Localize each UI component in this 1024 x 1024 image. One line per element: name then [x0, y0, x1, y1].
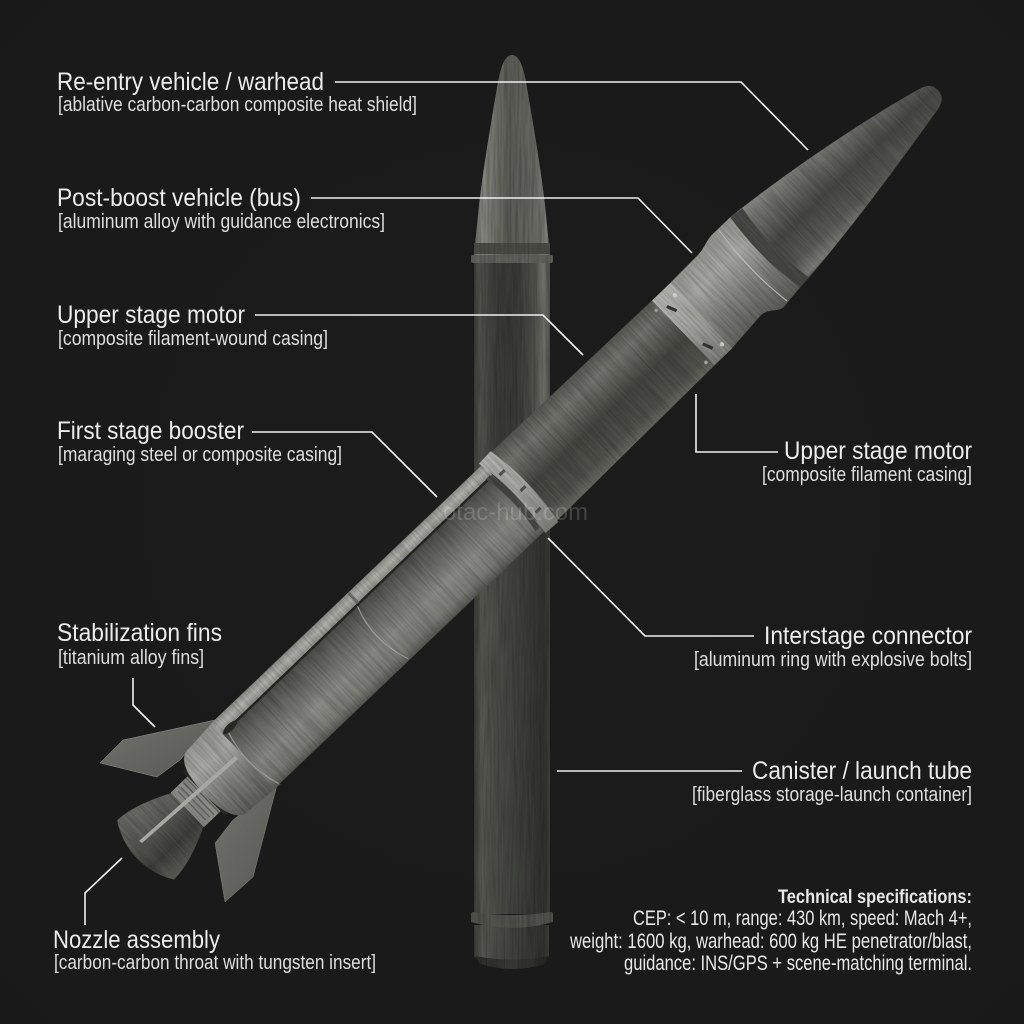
label: re-entry vehicle: [ablative carbon-carbon composite heat shield]: [58, 94, 417, 116]
canister foot: [475, 956, 549, 969]
booster rail tube: [212, 464, 495, 737]
leader: nozzle assembly: [85, 858, 122, 925]
canister tube lower body: [474, 530, 550, 914]
label: first stage booster: [57, 417, 342, 466]
label: canister: Canister / launch tube: [752, 757, 972, 785]
label: first stage booster: First stage booster: [57, 417, 244, 445]
nozzle threaded neck: [167, 766, 231, 831]
label: upper stage motor: [57, 301, 328, 350]
technical specifications: Technical specifications:: [778, 887, 972, 908]
label: nozzle assembly: [carbon-carbon throat with tungsten insert]: [54, 952, 376, 974]
label: interstage connector: Interstage connector: [764, 622, 972, 650]
nozzle bell: [108, 775, 222, 888]
booster seam: [352, 605, 408, 664]
canister bottom section: [474, 925, 549, 960]
canister tube upper body: [474, 260, 550, 532]
label: upper stage motor: [composite filament-wound casing]: [58, 328, 328, 350]
fin: upper left: [100, 720, 215, 777]
label: upper stage motor: Upper stage motor: [57, 301, 245, 329]
label: stabilization fins: [titanium alloy fins]: [58, 647, 204, 669]
fin: lower: [215, 785, 277, 902]
fin: centre blade: [139, 756, 238, 843]
label: interstage connector: [aluminum ring with explosive bolts]: [694, 649, 972, 671]
leader: post-boost vehicle: [311, 198, 692, 253]
label: post-boost vehicle: Post-boost vehicle (bus): [57, 184, 301, 212]
label: re-entry vehicle: Re-entry vehicle / warhead: [57, 68, 324, 96]
leader: re-entry vehicle: [335, 82, 808, 150]
leader: canister: [557, 770, 742, 772]
canister nose: [474, 55, 550, 255]
canister bottom collar: [471, 912, 553, 928]
technical specifications: [569, 887, 972, 975]
leader: upper stage motor right: [696, 394, 778, 452]
missile: [100, 52, 973, 902]
label: stabilization fins: [57, 619, 222, 669]
upper motor ring: [648, 283, 732, 369]
tail seam: [223, 730, 278, 788]
nose collar: [710, 216, 802, 311]
upper stage motor: [490, 296, 719, 522]
label: canister: [692, 757, 972, 806]
nose band: [728, 207, 810, 291]
tail section: [172, 718, 281, 827]
leader: interstage connector: [548, 538, 754, 636]
label: canister: [fiberglass storage-launch container]: [692, 784, 972, 806]
label: first stage booster: [maraging steel or composite casing]: [58, 444, 342, 466]
label: post-boost vehicle: [57, 184, 385, 233]
canister top collar: [471, 255, 553, 263]
post-boost neck: [664, 234, 784, 354]
label: nozzle assembly: Nozzle assembly: [53, 926, 220, 954]
leader: stabilization fins: [133, 678, 155, 727]
label: upper stage motor right: [composite filament casing]: [762, 464, 972, 486]
interstage connector ring: [474, 448, 562, 538]
label: re-entry vehicle: [57, 68, 417, 116]
label: nozzle assembly: [53, 926, 376, 974]
re-entry vehicle nose cone: [728, 52, 971, 291]
label: post-boost vehicle: [aluminum alloy with guidance electronics]: [58, 211, 385, 233]
canister band: [474, 243, 550, 254]
label: interstage connector: [694, 622, 972, 671]
canister / launch tube: [471, 55, 553, 969]
label: stabilization fins: Stabilization fins: [57, 619, 222, 647]
label: upper stage motor right: [762, 437, 972, 486]
nose tip seam: [915, 91, 936, 113]
leader: first stage booster: [252, 432, 437, 497]
leader lines: [85, 82, 808, 925]
label: upper stage motor right: Upper stage motor: [784, 437, 972, 465]
watermark: otac-hub.com: [443, 499, 588, 526]
first stage booster: [222, 475, 545, 789]
leader: upper stage motor left: [255, 315, 583, 355]
